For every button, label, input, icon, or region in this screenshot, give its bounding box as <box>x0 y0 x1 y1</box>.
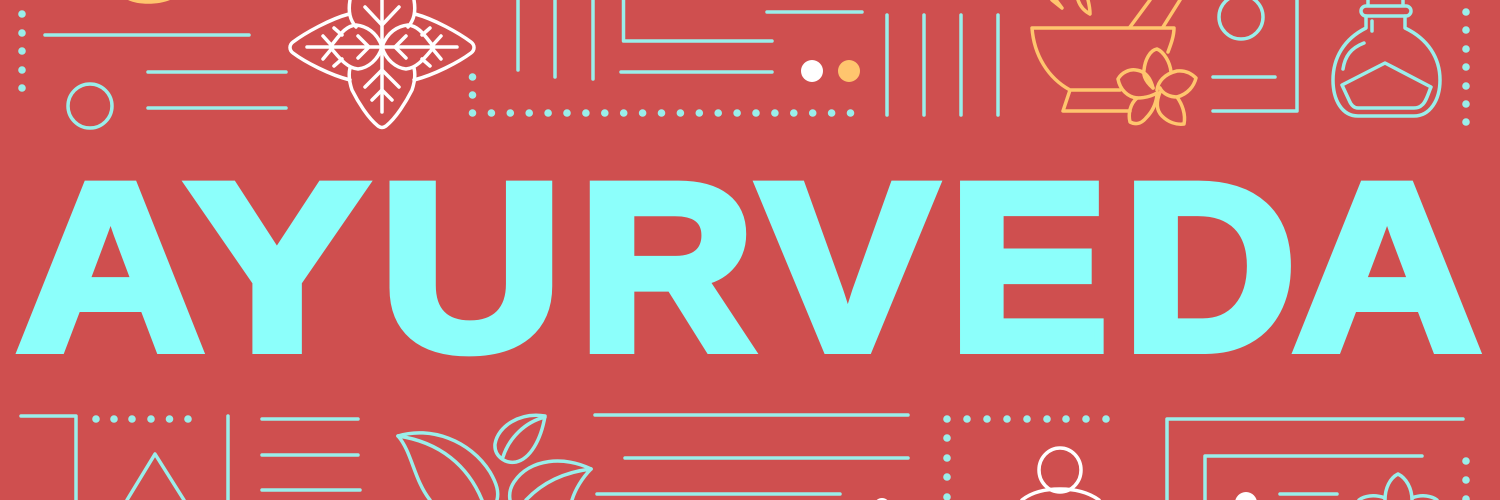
title: V <box>758 134 937 400</box>
top left lines and dots <box>18 10 286 128</box>
bottom right frames <box>1167 419 1463 500</box>
icon: mortar, pestle and flower <box>1032 0 1196 124</box>
title: Y <box>186 134 368 400</box>
bottom left frame, dots and drop <box>21 415 360 500</box>
icon: three leaves <box>398 415 591 500</box>
title: E <box>948 134 1108 400</box>
top right circle and bracket <box>1213 0 1297 111</box>
title: R <box>578 134 755 400</box>
bottom right dots <box>1462 457 1470 500</box>
title: U <box>379 134 563 400</box>
icon: meditating person <box>1022 448 1099 500</box>
title: A <box>1292 134 1482 400</box>
title: A <box>16 134 205 400</box>
title: D <box>1122 134 1296 400</box>
top middle lines and dotted frame <box>469 0 998 117</box>
icon: white herb leaves <box>290 0 474 128</box>
right dots <box>1462 8 1470 126</box>
bottom dotted frame <box>943 415 1110 500</box>
white dot <box>1235 492 1257 500</box>
icon: oil bottle <box>1333 0 1440 116</box>
bottom center lines <box>595 415 908 494</box>
icon: lotus <box>1359 474 1437 500</box>
small dot at bottom edge <box>874 498 890 500</box>
icon: orange fragment at top edge <box>128 0 170 4</box>
